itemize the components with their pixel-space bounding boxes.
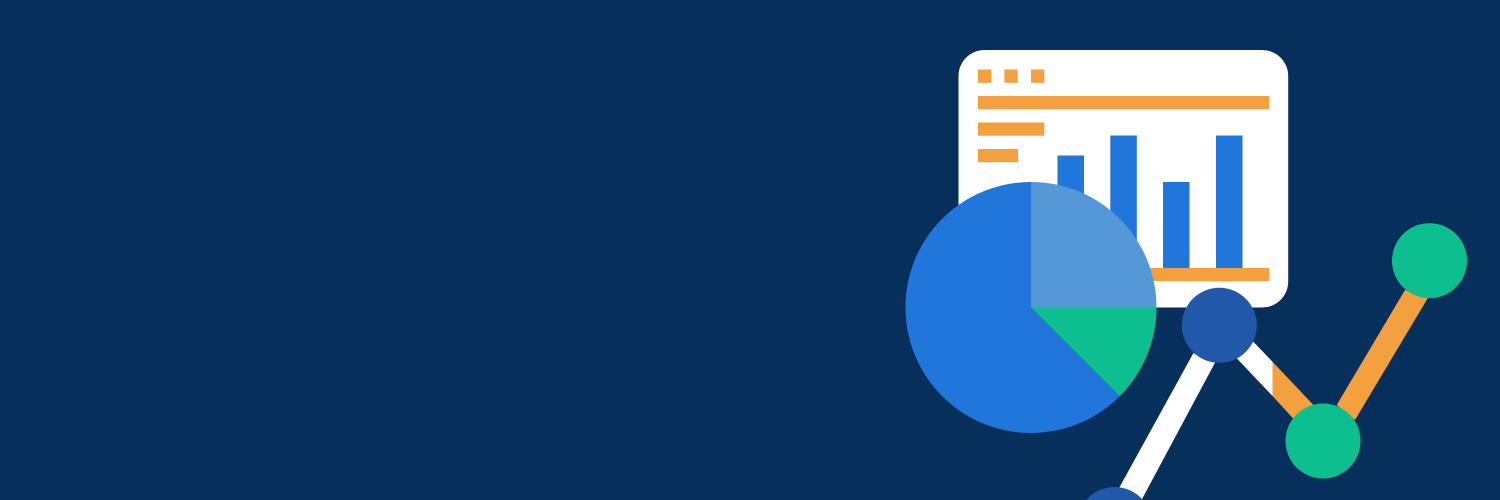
line segment: falling orange bbox=[1272, 362, 1320, 426]
bar chart bbox=[1058, 136, 1242, 268]
line segment: rising white bbox=[1112, 353, 1215, 500]
data point: top right bbox=[1392, 223, 1467, 298]
card background bbox=[958, 50, 1288, 308]
data point: bottom left bbox=[1086, 487, 1143, 500]
pie chart bbox=[905, 182, 1156, 433]
data point: trough bbox=[1286, 404, 1360, 478]
bar chart axis bbox=[978, 268, 1269, 281]
line chart bbox=[1086, 223, 1467, 500]
line segment: falling white bbox=[1237, 342, 1272, 396]
panel: dashboard card bbox=[958, 50, 1288, 308]
window header dots bbox=[978, 70, 1044, 83]
data point: peak bbox=[1182, 288, 1257, 363]
text placeholder bars bbox=[978, 96, 1269, 162]
pie slice: large blue bbox=[905, 182, 1120, 433]
pie slice: green bbox=[1031, 308, 1156, 396]
pie slice: light blue bbox=[1031, 182, 1156, 308]
line segment: rising orange bbox=[1337, 290, 1428, 420]
